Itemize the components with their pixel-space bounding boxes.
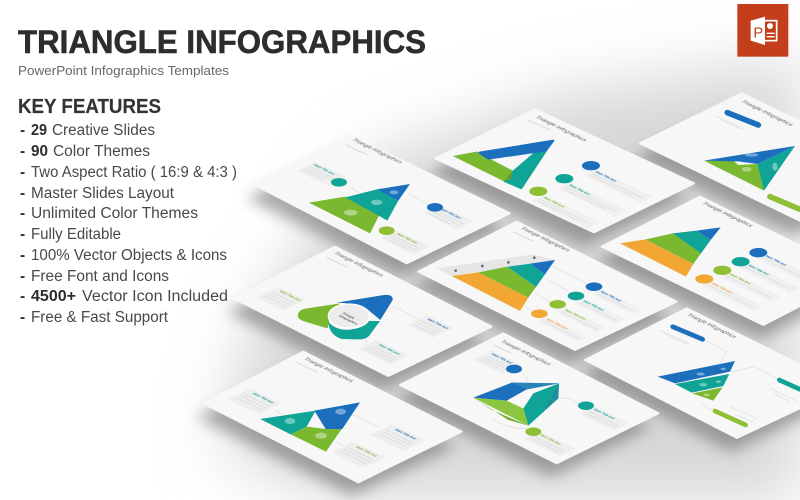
slide: triangle bottom left [203,352,462,482]
slide: stacked triangle top left [253,135,510,263]
slide title: Triangle Infographics [331,251,385,278]
info blocks: Main Title text [582,300,606,312]
funnel chart [658,361,735,401]
strip markers [454,256,536,272]
feature list: - [20,247,25,264]
pill label: green [770,197,800,209]
info blocks: Main Title text [542,196,566,208]
feature list: - [20,226,25,243]
triangle chart [260,402,360,452]
info blocks [537,289,642,342]
feature list [20,122,237,326]
info blocks: Main Title text [710,282,734,294]
feature list: 90 [31,143,48,160]
pill label: blue [673,327,703,339]
slide: 3D triangle [400,333,658,463]
pyramid chart [452,260,555,311]
pill label: blue [727,113,758,125]
triangle chart [309,184,410,233]
pill label: green [715,411,746,425]
heading: key features: KEY FEATURES [18,96,161,118]
info blocks: Main Title text [377,344,402,356]
triangle chart [704,146,795,191]
info block: green [380,230,430,254]
label strip [437,254,555,276]
feature list: - [20,185,25,202]
markers [695,248,767,284]
feature list: Fully Editable [31,226,121,243]
pyramid chart [620,227,721,277]
slide title: Triangle Infographics [498,340,552,366]
slide title: Triangle Infographics [700,201,754,228]
info blocks: Main Title text [394,428,418,440]
feature list: - [20,122,25,139]
triangle chart [453,141,553,189]
slide: funnel triangle [585,308,800,438]
markers [531,282,602,318]
feature list: - [20,288,25,305]
feature list: 4500+ [31,288,76,305]
cycle chart: Infographics [337,315,359,325]
markers [331,178,443,235]
feature list: Free & Fast Support [31,309,169,326]
slide panel [602,197,800,325]
feature list: 100% Vector Objects & Icons [31,247,227,264]
markers [529,161,600,196]
markers [506,365,594,436]
info blocks: Main Title text [747,264,771,276]
slide shadows [197,107,800,496]
info blocks: Main Title text [568,184,592,196]
slide title: Triangle Infographics [739,100,794,127]
info blocks: Main Title text [278,290,303,302]
feature list: - [20,164,25,181]
slide panel [203,352,462,482]
slide panel [400,333,658,463]
info block: blue: Main Title text [439,208,463,220]
info blocks: Main Title text [599,291,623,302]
pill label: teal [779,380,800,389]
slide panel [253,135,510,263]
slide title: Triangle Infographics [350,138,404,165]
cycle chart: Triangle [341,312,356,319]
slide panel [640,93,800,221]
info blocks: Main Title text [592,408,617,420]
subtitle: PowerPoint Infographics Templates [18,63,230,78]
info blocks [474,351,629,456]
feature list: - [20,268,25,285]
info blocks: Main Title text [251,392,276,404]
slide: rounded triangle top centre [435,109,694,232]
slide panel [435,109,694,232]
slide: pyramid with strip centre [418,222,677,350]
info blocks: Main Title text [728,273,753,285]
slide title: Triangle Infographics [518,226,571,253]
info blocks: Main Title text [539,434,563,446]
info block: blue [424,205,473,229]
feature list: - [20,143,25,160]
title: TRIANGLE INFOGRAPHICS [18,24,426,60]
info blocks: Main Title text [764,255,788,267]
feature list: 29 [31,122,47,139]
info blocks [228,388,425,468]
slide title: Triangle Infographics [301,357,355,383]
feature list: Master Slides Layout [31,185,175,202]
soft backdrop shadow [220,60,800,500]
slide panel [418,222,677,350]
icon: PowerPoint logo [737,4,788,57]
slide: rounded cycle triangle [233,247,492,376]
info blocks: Main Title text [426,318,450,330]
info block: green: Main Title text [395,233,420,245]
feature list: Vector Icon Included [82,288,228,305]
info blocks: Main Title text [563,309,588,321]
feature list: Two Aspect Ratio ( 16:9 & 4:3 ) [31,164,237,181]
slide title: Triangle Infographics [533,115,588,142]
info blocks: Main Title text [594,171,618,183]
feature list: Creative Slides [52,122,155,139]
feature list: Unlimited Color Themes [31,205,198,222]
info blocks: Main Title text [545,318,569,330]
3D triangle chart [473,383,559,426]
feature list: Free Font and Icons [31,268,169,285]
slide: pyramid right [602,197,800,325]
cycle chart [298,295,393,339]
slide panel [585,308,800,438]
slide panel [233,247,492,376]
info block: teal [297,162,347,186]
slide title: Triangle Infographics [685,313,738,339]
feature list: - [20,309,25,326]
info block: teal: Main Title text [312,164,337,176]
feature list: - [20,205,25,222]
info blocks: Main Title text [490,353,514,365]
info blocks [702,253,800,311]
slide: puzzle triangle top right [640,93,800,221]
icon: PowerPoint logo: P [753,25,763,41]
info blocks [532,169,653,229]
feature list: Color Themes [53,143,150,160]
info blocks: Main Title text [355,446,379,458]
info blocks [257,287,453,365]
